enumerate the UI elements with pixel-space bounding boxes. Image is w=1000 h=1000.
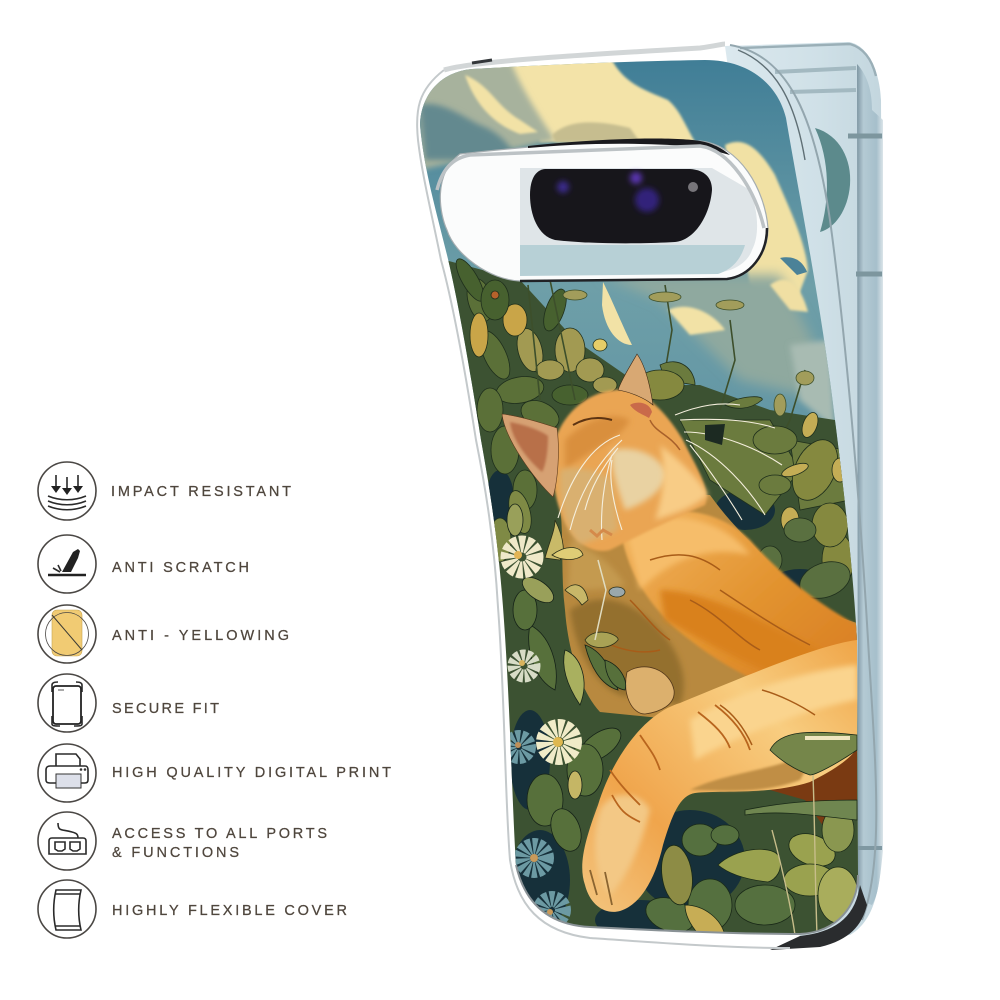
printed artwork xyxy=(410,55,870,950)
brown belly under leg xyxy=(770,750,857,824)
dark whisker gap xyxy=(705,424,725,445)
rear paw xyxy=(626,667,674,714)
lower right leaves xyxy=(641,732,858,939)
upper left leaves xyxy=(451,255,617,562)
left ear xyxy=(502,414,558,497)
infographic canvas xyxy=(37,42,883,950)
icon: impact resistant xyxy=(38,462,96,520)
feature text: ports and functions: ACCESS TO ALL PORTS xyxy=(112,826,327,842)
icon: flexible cover xyxy=(38,880,96,938)
case corner marks xyxy=(472,60,492,63)
white daisies xyxy=(509,544,573,756)
leg fur strokes xyxy=(590,705,750,905)
camera lens xyxy=(530,169,712,243)
printed artwork edge highlight xyxy=(516,865,858,934)
feature text: anti yellowing: ANTI - YELLOWING xyxy=(112,628,289,644)
feature text: secure fit: SECURE FIT xyxy=(112,701,219,717)
mouth xyxy=(650,420,680,450)
icon: digital print xyxy=(38,744,96,802)
right side leaves xyxy=(636,362,855,605)
front foreground leaves by collar xyxy=(545,520,625,648)
clear case outline xyxy=(417,70,790,948)
shadow at top of pill xyxy=(528,139,730,155)
whiskers xyxy=(558,404,782,540)
lens flash xyxy=(688,182,698,192)
foliage base xyxy=(445,260,870,950)
body fur strokes xyxy=(600,555,815,745)
sky xyxy=(410,55,870,475)
feature text: digital print: HIGH QUALITY DIGITAL PRINT xyxy=(112,765,391,781)
case top rim xyxy=(444,44,725,70)
head xyxy=(553,389,707,551)
dark leaf shadows xyxy=(486,470,830,940)
lower left leaves xyxy=(507,504,627,855)
closed eye xyxy=(573,418,612,425)
feature text: ports and functions xyxy=(112,826,327,861)
blue daisies xyxy=(509,737,563,921)
pill rim highlight xyxy=(437,146,764,228)
clouds xyxy=(420,60,835,430)
feature text: anti scratch: ANTI SCRATCH xyxy=(112,560,249,576)
stems and small plants in the sky xyxy=(527,282,814,416)
phone body behind case xyxy=(725,42,883,950)
icon: anti scratch xyxy=(38,535,96,593)
icon: anti yellowing xyxy=(38,605,96,663)
glass tint inside pill xyxy=(520,168,757,272)
icon: secure fit xyxy=(38,674,96,732)
pill lower dark rim xyxy=(520,228,767,281)
front leg xyxy=(582,640,857,912)
right ear xyxy=(618,354,653,405)
lower glass band xyxy=(520,245,745,276)
feature text: flexible cover: HIGHLY FLEXIBLE COVER xyxy=(112,903,347,919)
feature text: ports and functions: & FUNCTIONS xyxy=(112,845,239,861)
icon: ports xyxy=(38,812,96,870)
camera cutout pill xyxy=(437,139,768,281)
feature list xyxy=(38,462,391,938)
lens glints xyxy=(557,172,659,212)
nose xyxy=(630,403,652,418)
cat body xyxy=(502,354,857,912)
feature text: impact resistant: IMPACT RESISTANT xyxy=(111,484,291,500)
